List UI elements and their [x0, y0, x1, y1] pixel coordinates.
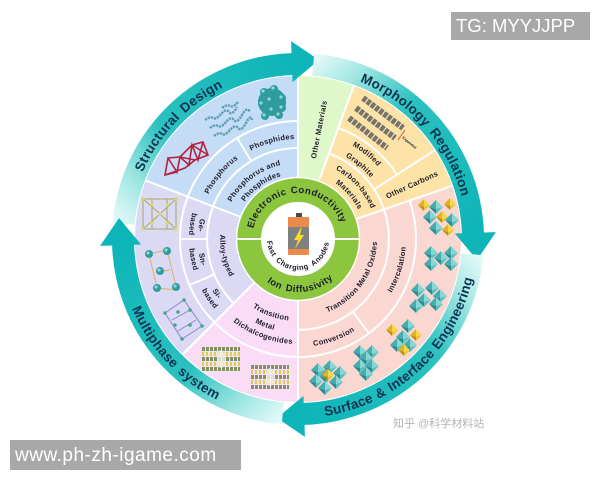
image: oxide crystal 4 [409, 281, 447, 313]
image: tin lattice [145, 247, 180, 292]
watermark: website box [10, 440, 241, 470]
image: dichalcogenide crystal right [251, 367, 289, 387]
label: Other Carbons: Other Carbons [384, 169, 440, 201]
label: Alloy-typed: Alloy-typed [219, 234, 234, 276]
panel: other materials sector [298, 75, 354, 239]
label: Carbon-based Materials: Carbon-based [336, 166, 376, 208]
label: Si-based: based [202, 288, 218, 308]
label: Conversion: Conversion [313, 328, 354, 346]
panel: alloy-typed sector [134, 180, 298, 355]
label: Sn-based: Sn- [199, 253, 205, 265]
image: layered phosphorus waves [205, 102, 252, 136]
ring label: Ion Diffusivity: Ion Diffusivity [268, 275, 332, 292]
ring label: Electronic Conductivity: Electronic Conductivity [247, 186, 346, 228]
label: Phosphorus and Phosphides: Phosphides [240, 172, 280, 202]
label: Modified Graphite: Modified [352, 142, 382, 166]
panel: metal oxides sector [298, 186, 462, 403]
image: germanium lattice [141, 197, 178, 231]
label: Ge-based: Ge- [198, 219, 205, 232]
label: Transition Metal Dichalcogenides [234, 303, 292, 344]
label: Modified Graphite [346, 142, 382, 177]
watermark: TG box [451, 12, 590, 40]
icon: battery [288, 213, 309, 255]
arrow: structural design [113, 41, 319, 225]
label: Phosphorus and Phosphides: Phosphorus and [227, 160, 280, 202]
image: red phosphorus lattice [165, 142, 208, 175]
label: Ge-based [189, 213, 205, 235]
watermark: zhihu: 知乎 @科学材料站 [393, 416, 484, 430]
heading: Surface and Interface Engineering: Surface & Interface Engineering [324, 278, 474, 416]
image: expanded graphite [349, 98, 417, 150]
label: Sn-based [189, 248, 205, 270]
label: Phosphorus: Phosphorus [204, 156, 238, 194]
image: oxide crystal 1 [309, 360, 347, 395]
label: Transition Metal Dichalcogenides: Dichalcogenides [234, 318, 292, 344]
panel: structural design sector [145, 75, 298, 239]
arrow: morphology regulation [312, 54, 496, 260]
heading: Structural Design: Structural Design [135, 82, 222, 172]
heading: Morphology Regulation: Morphology Regulation [360, 74, 468, 196]
label: Intercalation: Intercalation [387, 247, 406, 292]
image: oxide crystal 2 [353, 345, 379, 381]
label: Transition Metal Dichalcogenides: Transition [254, 303, 288, 320]
label: Transition Metal Oxides: Transition Metal Oxides [325, 242, 377, 312]
center ring: green [249, 190, 347, 288]
arrow: multiphase system [100, 218, 284, 424]
label: Other Materials: Other Materials [309, 100, 329, 159]
label: Si-based: Si- [213, 288, 220, 298]
watermark: website box: www.ph-zh-igame.com [14, 445, 217, 466]
arrow: surface and interface engineering [277, 253, 483, 437]
image: dichalcogenide crystal left [202, 349, 240, 369]
panel: carbon sector [298, 85, 453, 239]
image: expanded graphite: Expanded [401, 136, 417, 150]
heading: Multiphase system: Multiphase system [132, 306, 219, 400]
label: Modified Graphite: Graphite [346, 153, 373, 177]
image: phosphide cluster [258, 85, 286, 120]
image: oxide crystal 6 [418, 198, 459, 236]
image: oxide crystal 3 [386, 319, 422, 356]
label: Phosphides: Phosphides [249, 134, 294, 150]
label: Carbon-based Materials: Materials [336, 180, 362, 209]
panel: dichalcogenides sector [182, 239, 298, 403]
image: oxide crystal 5 [424, 246, 458, 271]
watermark: TG box: TG: MYYJJPP [456, 15, 575, 36]
label: Sn-based: based [189, 248, 199, 270]
label: Transition Metal Dichalcogenides: Metal [256, 318, 275, 330]
center disc: white [260, 201, 336, 277]
label: Ge-based: based [189, 213, 198, 235]
image: silicon lattice [163, 298, 204, 341]
center label: Fast Charging Anodes: Fast Charging Anodes [267, 240, 329, 272]
